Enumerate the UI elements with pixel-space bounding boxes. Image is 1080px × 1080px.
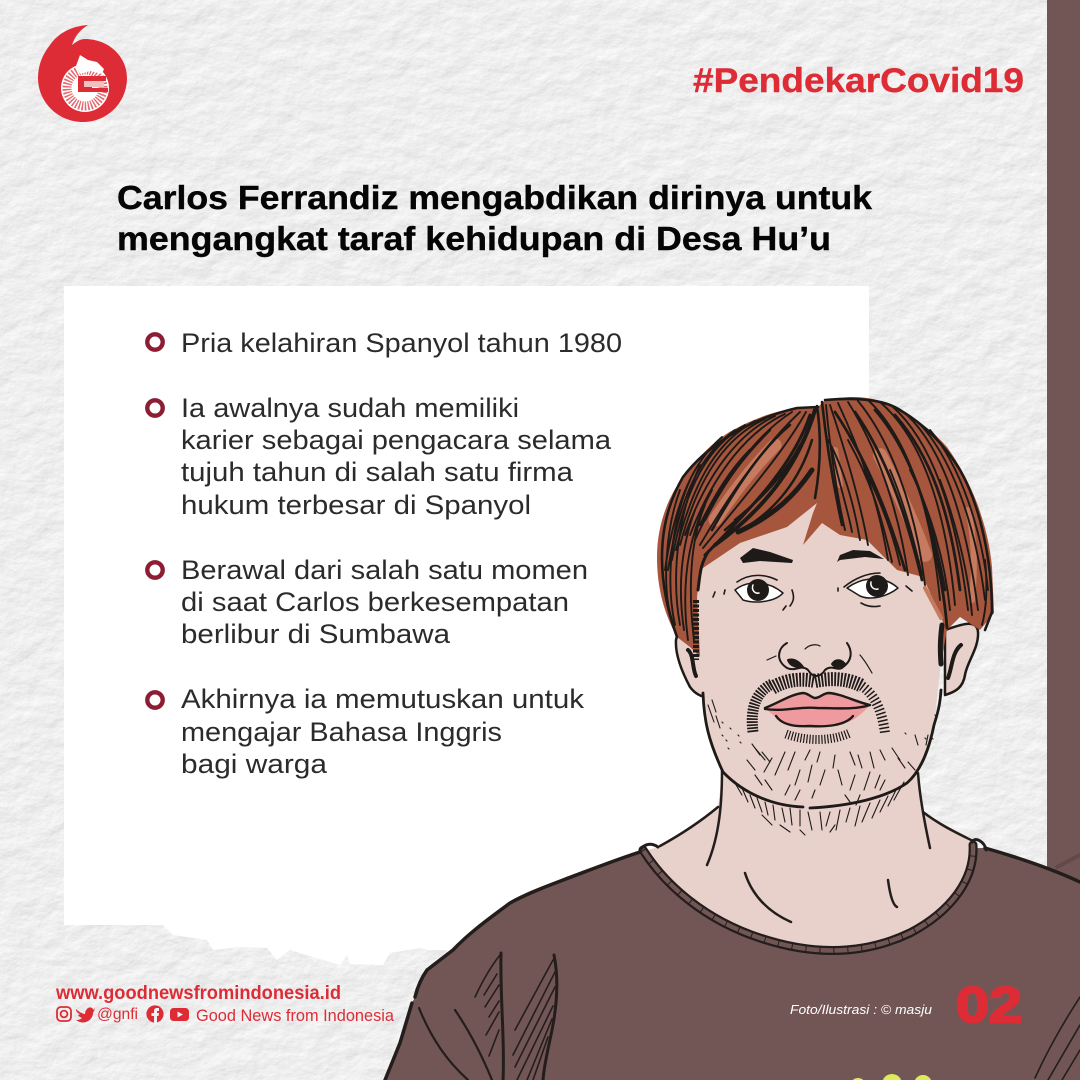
- neck lines: [660, 770, 973, 922]
- title: [117, 179, 873, 257]
- bullet 4: bagi warga: [181, 749, 328, 779]
- bullet 4: mengajar Bahasa Inggris: [181, 717, 502, 747]
- collar: [640, 840, 986, 950]
- right side strip: [1047, 0, 1080, 1080]
- title: mengangkat taraf kehidupan di Desa Hu’u: [117, 220, 831, 257]
- social icons and handles: [57, 1005, 395, 1025]
- bullet 2: Ia awalnya sudah memiliki: [181, 393, 519, 423]
- illustration: man portrait: [385, 397, 1080, 1080]
- footer website: www.goodnewsfromindonesia.id: [55, 983, 341, 1004]
- icon: facebook: [146, 1005, 164, 1023]
- stubble: [708, 700, 936, 835]
- bullet 4: [147, 684, 585, 779]
- handle: @gnfi: [97, 1006, 138, 1023]
- logo: [38, 25, 127, 122]
- bullet 3: di saat Carlos berkesempatan: [181, 587, 569, 617]
- bullet 2: hukum terbesar di Spanyol: [181, 490, 531, 520]
- shirt: [385, 848, 1080, 1080]
- eyebrows: [740, 548, 884, 563]
- white text panel: [64, 286, 869, 980]
- hair: [657, 397, 994, 664]
- page name: Good News from Indonesia: [196, 1006, 395, 1025]
- bullet 2: [147, 393, 612, 520]
- icon: instagram: [57, 1007, 71, 1021]
- face: [690, 480, 948, 808]
- bullet 2: karier sebagai pengacara selama: [181, 425, 612, 455]
- hair highlights: [715, 445, 974, 618]
- hashtag: #PendekarCovid19: [693, 62, 1024, 100]
- bullet 3: [147, 555, 588, 649]
- bullet 3: Berawal dari salah satu momen: [181, 555, 588, 585]
- neck and chest skin: [643, 760, 977, 950]
- bullet list: [147, 328, 622, 779]
- mustache and lips: [752, 679, 885, 733]
- bullet 2: tujuh tahun di salah satu firma: [181, 457, 574, 487]
- nose: [767, 643, 872, 676]
- yellow shirt dots: [850, 1074, 932, 1080]
- title: Carlos Ferrandiz mengabdikan dirinya untuk: [117, 179, 873, 216]
- right eye: [838, 573, 912, 607]
- bullet 4: Akhirnya ia memutuskan untuk: [181, 684, 585, 714]
- bullet 3: berlibur di Sumbawa: [181, 619, 451, 649]
- hair strands: [662, 399, 992, 664]
- ears: [676, 624, 978, 697]
- bullet 1: Pria kelahiran Spanyol tahun 1980: [181, 328, 622, 358]
- icon: youtube: [170, 1008, 189, 1021]
- icon: twitter: [76, 1007, 95, 1022]
- photo credit: Foto/Ilustrasi : © masju: [790, 1002, 932, 1017]
- left eye: [713, 575, 793, 610]
- page number: 02: [956, 977, 1022, 1033]
